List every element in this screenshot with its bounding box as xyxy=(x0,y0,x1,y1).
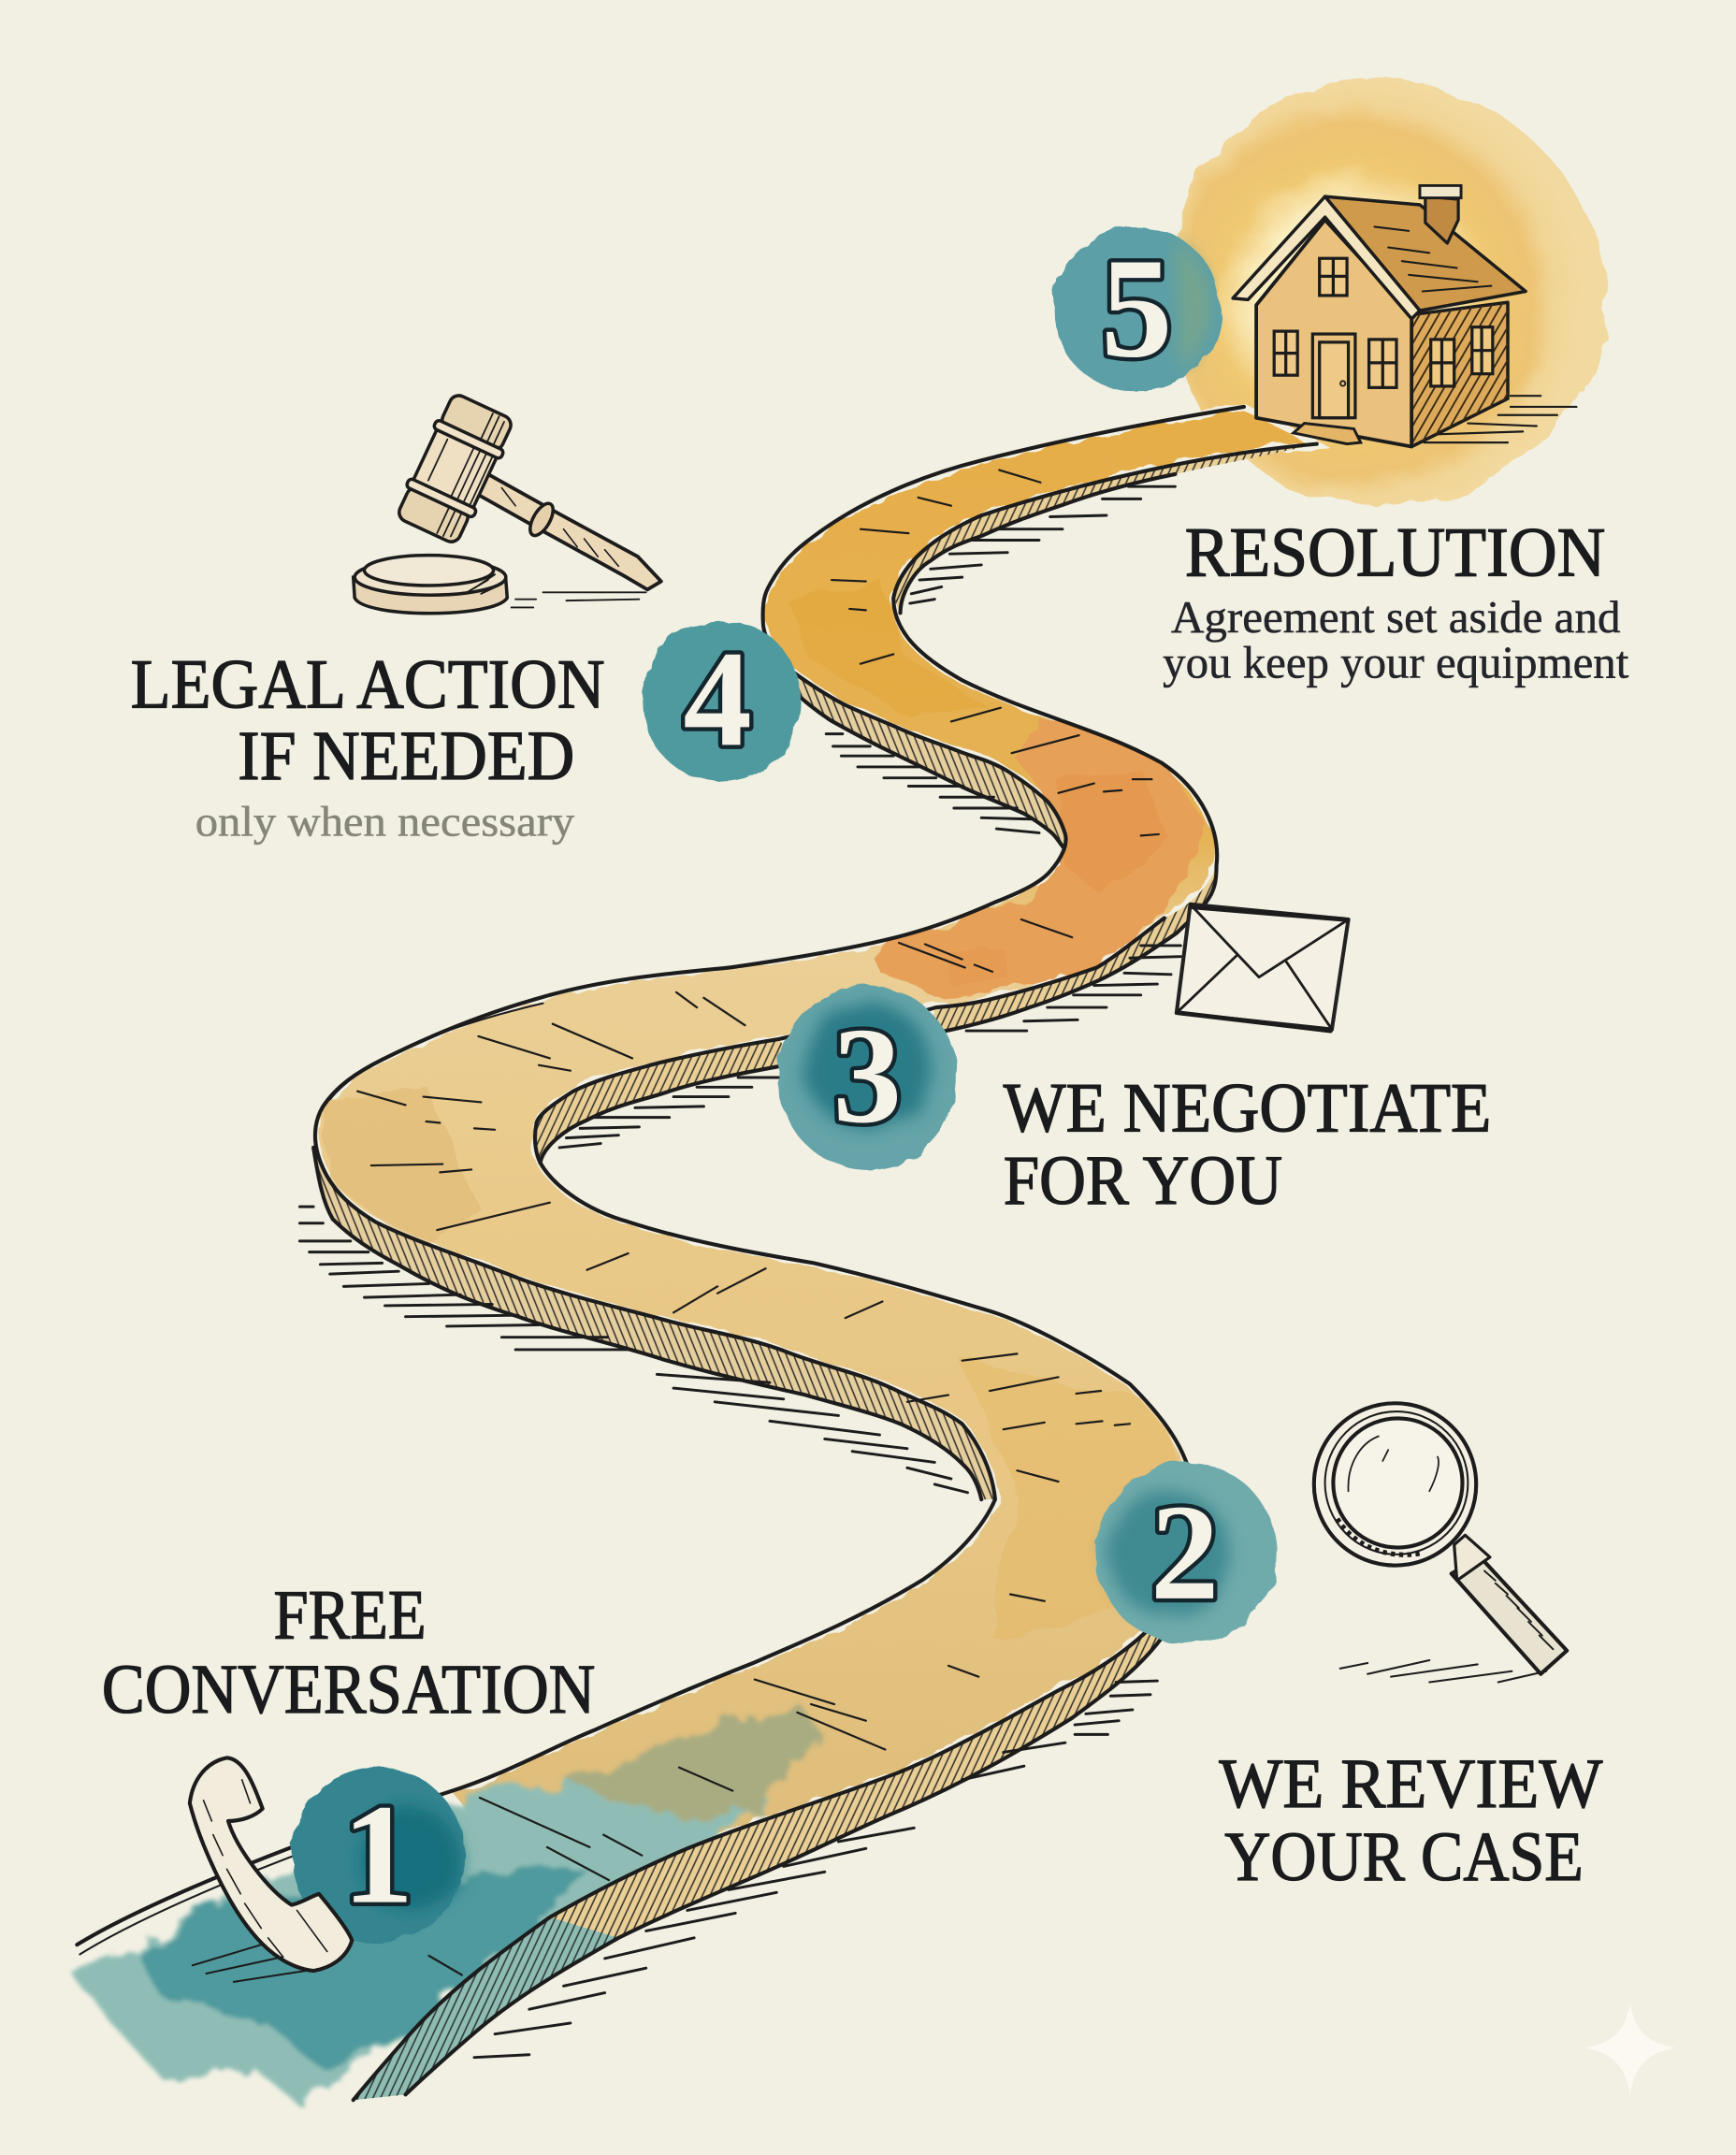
chimney xyxy=(1425,196,1458,243)
step 4: number badge: 4 xyxy=(683,622,752,774)
step 2: number badge: 2 xyxy=(1150,1476,1219,1628)
gavel handle xyxy=(478,474,661,589)
heading: free conversation: CONVERSATION xyxy=(102,1651,595,1728)
heading: legal action if needed: LEGAL ACTION xyxy=(131,646,605,724)
heading: resolution xyxy=(1163,514,1629,687)
gable trim xyxy=(1233,196,1420,319)
magnifier lens xyxy=(1333,1418,1463,1548)
gavel head xyxy=(392,391,517,546)
step 2: number badge xyxy=(1095,1462,1277,1643)
icon: telephone handset xyxy=(190,1757,352,1982)
road ink edges xyxy=(77,407,1317,2100)
teal wash at road start xyxy=(71,1701,822,2104)
side wall hatching xyxy=(1411,302,1508,447)
heading: free conversation xyxy=(102,1577,595,1728)
heading: we negotiate for you: WE NEGOTIATE xyxy=(1004,1069,1491,1147)
road side walls xyxy=(313,444,1317,2100)
front wall xyxy=(1256,220,1411,447)
heading: we negotiate for you: FOR YOU xyxy=(1004,1142,1282,1220)
icon: gavel xyxy=(354,391,661,614)
heading: legal action if needed: IF NEEDED xyxy=(238,717,574,795)
description: agreement set aside: you keep your equipment xyxy=(1163,638,1629,687)
orange stretch xyxy=(873,720,1207,998)
roof side xyxy=(1325,196,1526,311)
heading: resolution: RESOLUTION xyxy=(1185,514,1605,592)
roof shingle lines xyxy=(1374,226,1491,292)
road surface xyxy=(315,407,1317,1917)
heading: we review your case: YOUR CASE xyxy=(1224,1818,1584,1896)
windows and door xyxy=(1274,258,1493,418)
icon: sparkle watermark xyxy=(1584,2003,1675,2094)
gavel sounding block xyxy=(354,556,507,614)
road xyxy=(71,407,1317,2104)
ground shadow hatching xyxy=(299,486,1180,2058)
magnifier rim xyxy=(1314,1403,1476,1566)
description: agreement set aside xyxy=(1163,593,1629,687)
step 3: number badge xyxy=(778,986,957,1169)
step 3: number badge: 3 xyxy=(833,999,902,1151)
gavel collar xyxy=(526,499,557,539)
side wall xyxy=(1411,302,1508,447)
icon: magnifying glass xyxy=(1314,1403,1567,1683)
step 4: number badge xyxy=(642,620,802,782)
step 1: number badge: 1 xyxy=(342,1776,413,1934)
magnifier handle xyxy=(1452,1557,1567,1674)
house ground shadow xyxy=(1424,396,1576,442)
step 1: number badge xyxy=(292,1768,465,1944)
heading: we review your case xyxy=(1219,1745,1603,1896)
road colour variation xyxy=(323,577,1207,1636)
icon: envelope xyxy=(1177,904,1349,1031)
step 5: number badge xyxy=(1053,226,1221,392)
heading: we negotiate for you xyxy=(1004,1069,1491,1220)
front steps xyxy=(1294,424,1361,444)
note: only when necessary: only when necessary xyxy=(195,797,575,845)
heading: free conversation: FREE xyxy=(273,1577,427,1655)
icon: house xyxy=(1233,185,1576,447)
magnifier shadow xyxy=(1340,1660,1546,1683)
road surface tick marks xyxy=(357,470,1159,1975)
heading: legal action if needed xyxy=(131,646,605,845)
step 5: number badge: 5 xyxy=(1101,230,1172,388)
heading: we review your case: WE REVIEW xyxy=(1219,1745,1603,1823)
description: agreement set aside: Agreement set aside and xyxy=(1171,593,1620,643)
house glow wash xyxy=(1163,77,1605,506)
